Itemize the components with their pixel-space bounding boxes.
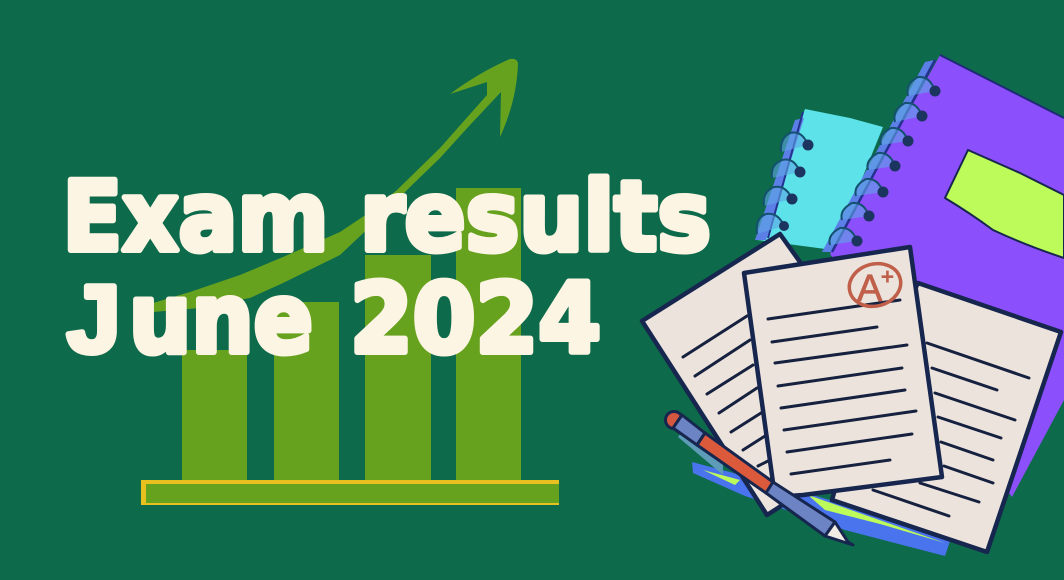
illustration: notebooks, papers and pen	[642, 55, 1064, 556]
grade stamp: A+	[844, 258, 906, 312]
right paper	[832, 283, 1061, 552]
pen	[666, 412, 853, 545]
title word: June: une	[129, 263, 313, 375]
cyan notebook	[755, 109, 883, 250]
title word: June: J	[67, 266, 120, 373]
purple notebook	[822, 55, 1064, 497]
blue book under papers	[692, 462, 952, 556]
arrow: rising trend	[153, 59, 518, 312]
grade stamp: A+: +	[881, 264, 894, 289]
bar chart	[182, 188, 521, 480]
left paper	[642, 234, 815, 515]
grade stamp: A+: A	[857, 268, 883, 310]
title word: results: results	[360, 161, 711, 273]
title	[62, 161, 711, 375]
notebook label	[945, 150, 1064, 258]
center paper with grade	[744, 247, 942, 497]
title word: 2024: 2024	[350, 263, 601, 375]
chart baseline	[141, 480, 559, 505]
title word: Exam: Exam	[62, 161, 328, 273]
